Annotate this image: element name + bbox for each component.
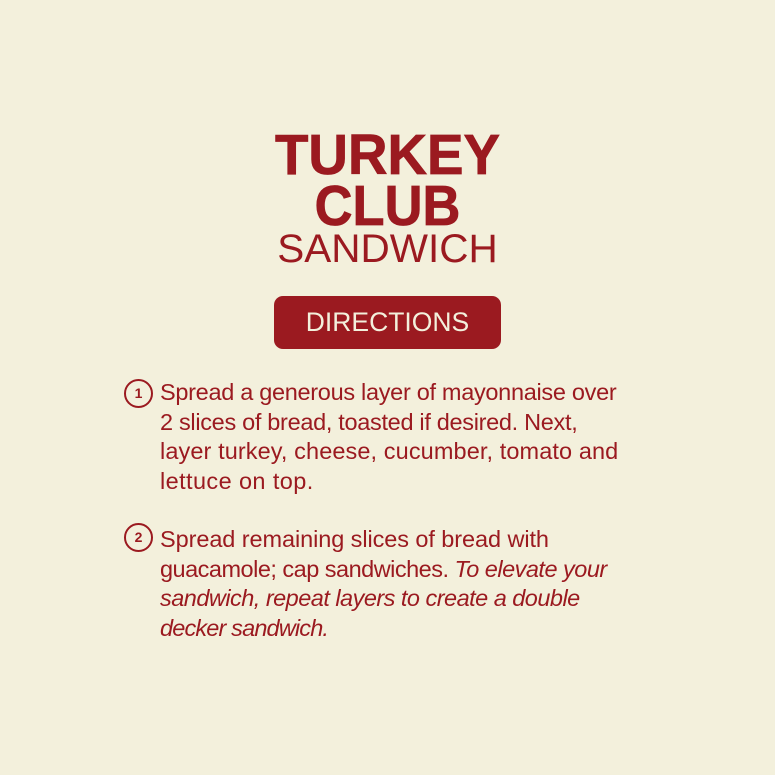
title line: turkey: TURKEY bbox=[275, 123, 500, 187]
step 2 text bbox=[160, 526, 608, 641]
directions badge bbox=[274, 296, 501, 349]
step 2 number icon: 2 bbox=[135, 529, 142, 545]
step 1 bbox=[124, 379, 618, 494]
directions badge: DIRECTIONS bbox=[306, 307, 469, 337]
step 1 text: Spread a generous layer of mayonnaise over bbox=[160, 379, 616, 405]
step 1 text: lettuce on top. bbox=[160, 468, 314, 494]
step 2 text: guacamole; cap sandwiches. To elevate your bbox=[160, 556, 607, 582]
title line: sandwich: SANDWICH bbox=[277, 227, 498, 271]
step 1 number icon bbox=[124, 379, 153, 408]
title line: club: CLUB bbox=[315, 174, 460, 238]
step 2 text: decker sandwich. bbox=[160, 615, 328, 641]
step 1 text: layer turkey, cheese, cucumber, tomato and bbox=[160, 438, 618, 464]
step 2 number icon bbox=[124, 523, 153, 552]
step 1 number icon: 1 bbox=[135, 385, 142, 401]
step 1 text bbox=[160, 379, 618, 494]
step 1 text: 2 slices of bread, toasted if desired. Next, bbox=[160, 409, 577, 435]
title bbox=[275, 123, 500, 271]
step 2 text: Spread remaining slices of bread with bbox=[160, 526, 549, 552]
step 2 bbox=[124, 523, 608, 641]
step 2 text: sandwich, repeat layers to create a double bbox=[160, 585, 580, 611]
